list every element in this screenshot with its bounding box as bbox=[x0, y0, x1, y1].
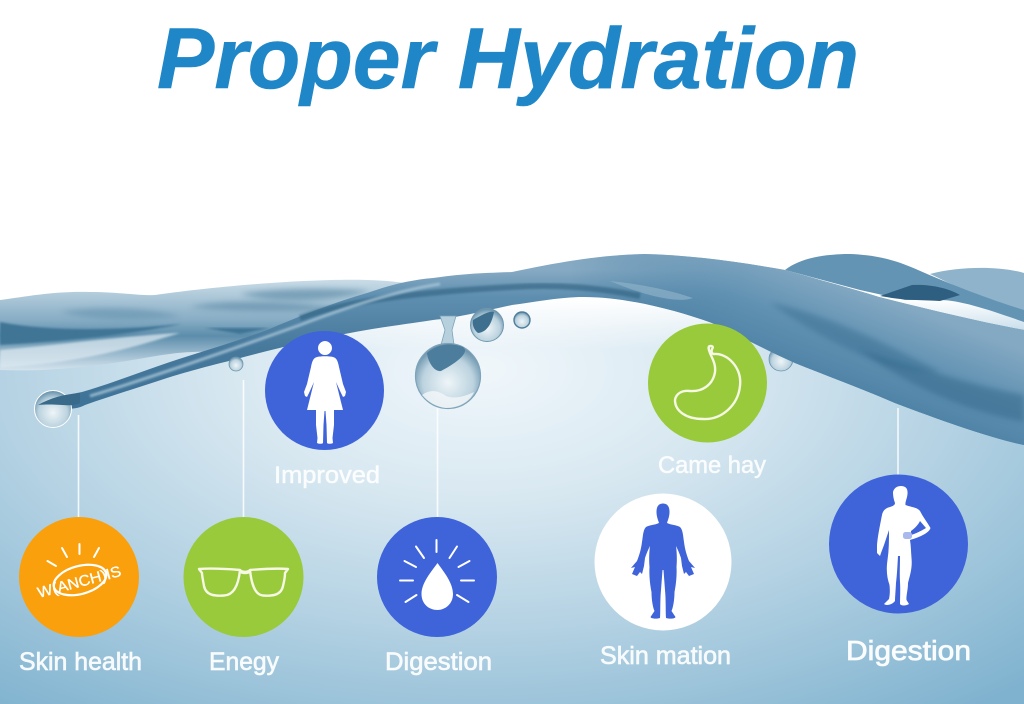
water droplets bbox=[34, 308, 530, 428]
droplet: medium bbox=[470, 308, 504, 342]
panel: digestion drop bbox=[377, 517, 497, 637]
panel: stomach badge bbox=[648, 324, 767, 442]
label: energy: Enegy bbox=[209, 648, 279, 676]
icon: drop with rays bbox=[400, 540, 474, 610]
label: skin health: Skin health bbox=[19, 648, 142, 676]
icon: woman bbox=[304, 341, 346, 444]
connector lines bbox=[78, 380, 898, 518]
label: digestion right: Digestion bbox=[846, 635, 971, 666]
title: Proper Hydration bbox=[157, 11, 859, 107]
droplet: large bbox=[416, 344, 480, 408]
icon: blue body bbox=[631, 504, 695, 619]
icon: vitamins sunburst: W(ANCH)IS bbox=[36, 563, 123, 602]
rear ribbon right bbox=[785, 254, 1024, 322]
ribbon right sheen bbox=[594, 254, 1024, 445]
droplet: tail bbox=[34, 390, 80, 428]
label: digestion: Digestion bbox=[385, 648, 492, 676]
panel: digestion body bbox=[829, 474, 968, 614]
far wave right bbox=[930, 268, 1024, 322]
icon: glasses bbox=[199, 569, 288, 596]
panel: woman badge bbox=[265, 331, 384, 450]
dark fold bbox=[880, 285, 960, 301]
water wave surface bbox=[0, 254, 1024, 445]
main ribbon bbox=[50, 254, 1024, 445]
label: improved: Improved bbox=[274, 462, 380, 489]
label: came hay: Came hay bbox=[658, 452, 766, 479]
label: skin mation: Skin mation bbox=[600, 642, 731, 670]
panel: skin mation bbox=[594, 494, 732, 630]
panel: energy bbox=[184, 517, 304, 637]
icon: stomach bbox=[675, 346, 740, 419]
icon: white body hand on hip bbox=[877, 486, 930, 606]
back wave left bbox=[0, 280, 420, 370]
droplet: stem bbox=[440, 316, 456, 345]
droplet: small bbox=[514, 312, 530, 328]
panel: skin health bbox=[19, 517, 139, 637]
droplet: right, behind ribbon bbox=[769, 347, 793, 371]
droplet: small left bbox=[229, 357, 243, 371]
